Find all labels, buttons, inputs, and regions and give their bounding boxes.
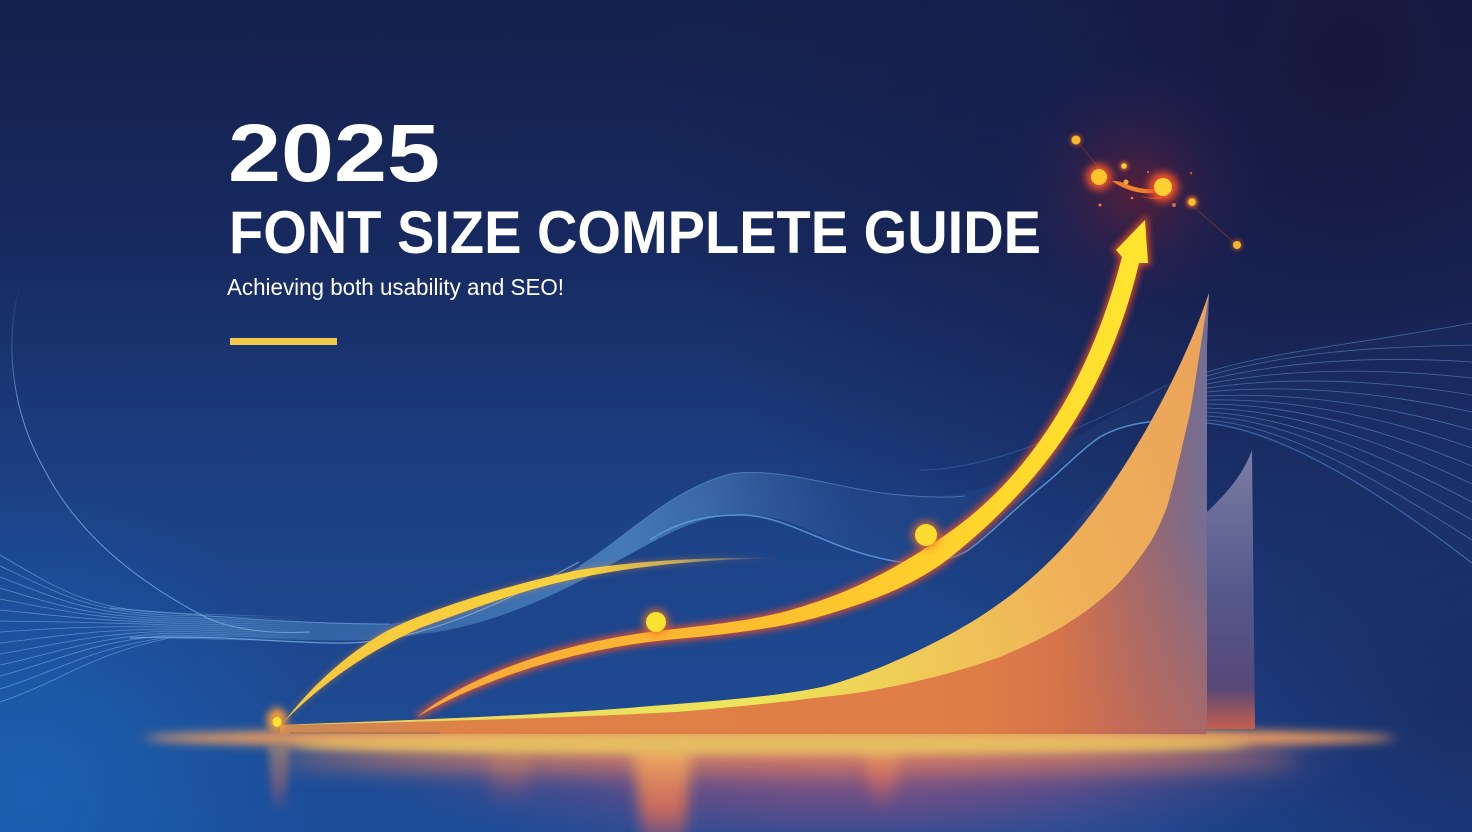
sparks at arrow tip [1070,134,1242,250]
thin left arc line [12,280,310,632]
chart: rear translucent shard [1207,450,1255,729]
title: year: 2025 [228,108,440,199]
chart: curved swoosh [280,293,1209,725]
floor glow and reflections [145,727,1420,832]
data point: start dot [267,708,287,732]
chart: rising area body [280,293,1209,734]
title: guide name: FONT SIZE COMPLETE GUIDE [229,199,1041,266]
main glowing arrow [417,220,1148,717]
left fan lines [0,555,320,702]
chart: base shadow [290,732,440,734]
right fan lines [1207,323,1472,540]
data point: upper dot [912,521,940,549]
data point: middle dot [643,609,669,635]
flowing wave ribbon [0,323,1472,702]
subtitle: Achieving both usability and SEO! [227,274,564,300]
thin rising curve [284,558,780,722]
accent bar [230,338,337,345]
